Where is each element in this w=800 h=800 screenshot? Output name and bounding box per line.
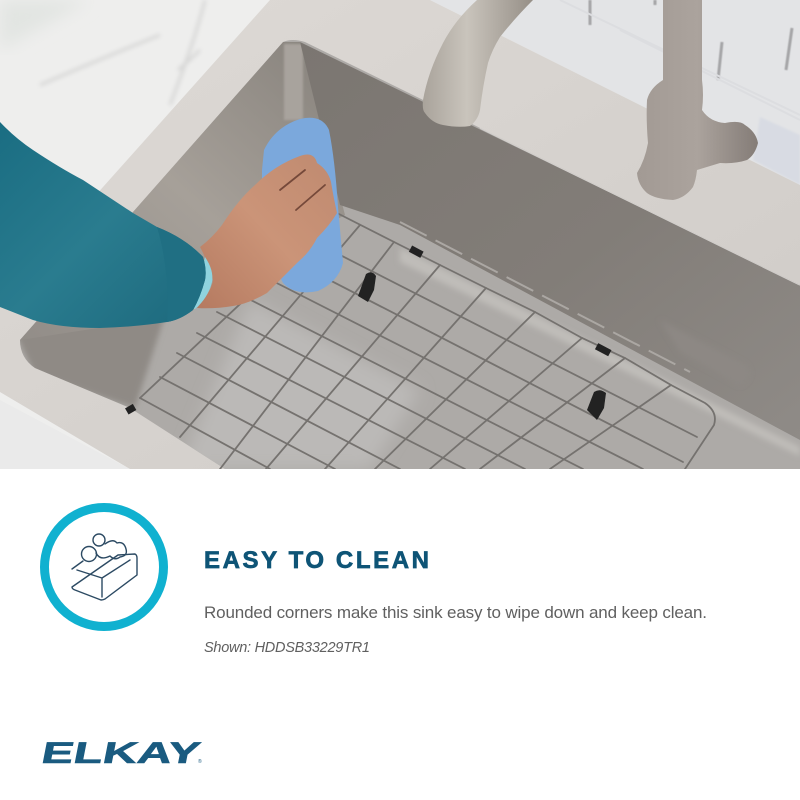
sink basin — [20, 40, 800, 469]
backsplash tiles — [430, 0, 800, 185]
teal ring — [44, 508, 164, 626]
teal sweater sleeve — [0, 122, 206, 328]
basin floor — [20, 40, 800, 469]
countertop — [0, 0, 800, 469]
icon: soap bar in teal ring — [44, 508, 164, 626]
bright cell highlights — [190, 306, 414, 468]
blue microfiber cloth — [262, 118, 343, 292]
soap bar with bubbles — [72, 534, 137, 600]
logo: Elkay: ELKAY — [39, 737, 203, 770]
logo: Elkay: ® — [198, 758, 202, 765]
grid bumpers and feet — [125, 246, 611, 420]
marble countertop background — [0, 0, 270, 469]
photo: hand wiping stainless steel sink — [0, 0, 800, 469]
body text: Rounded corners make this sink easy to wipe down and keep clean. — [204, 603, 707, 622]
model caption: Shown: HDDSB33229TR1 — [204, 640, 370, 656]
bright floor band — [400, 248, 800, 456]
floor seam — [400, 222, 690, 372]
faucet spout — [423, 0, 533, 127]
left wall — [20, 42, 345, 340]
faucet body and handle — [637, 0, 758, 200]
wire sink grid — [140, 213, 715, 469]
hand — [197, 155, 337, 308]
light blue undersleeve — [194, 257, 212, 309]
heading: easy to clean: EASY TO CLEAN — [204, 547, 429, 574]
back wall — [300, 42, 800, 440]
logo: Elkay — [39, 737, 203, 770]
